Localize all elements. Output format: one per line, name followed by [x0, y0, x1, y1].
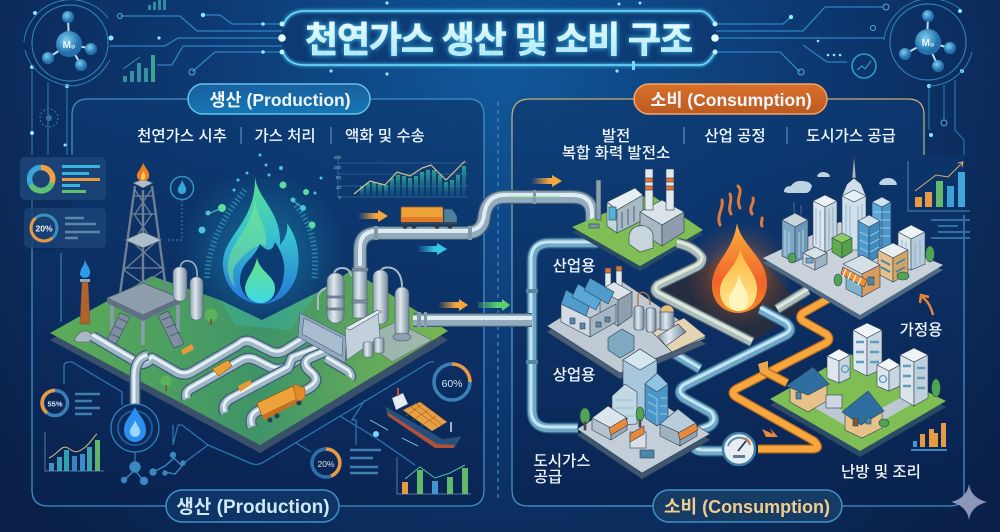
icon: four point star	[951, 484, 987, 520]
central orange flame	[712, 186, 767, 313]
city towers	[782, 155, 934, 297]
heading: production pill bottom	[166, 490, 339, 522]
title: 천연가스 생산 및 소비 구조	[305, 19, 693, 60]
truck on pipe	[401, 207, 457, 229]
flame glow	[177, 170, 347, 340]
donut 20%: 20%	[317, 459, 335, 469]
label: commercial: 상업용	[553, 366, 595, 384]
label: city gas supply: 도시가스	[533, 452, 591, 470]
donut 55%	[42, 390, 100, 416]
donut 60%	[434, 364, 470, 400]
line chart: production trend: 300	[333, 155, 341, 160]
ship	[370, 388, 462, 448]
arrows: consumption	[762, 295, 933, 437]
residential platform	[770, 354, 946, 457]
platform: power plant	[572, 194, 703, 271]
chart: residential bars	[911, 423, 947, 451]
heading: production pill	[188, 84, 370, 114]
heading: production pill: 생산 (Production)	[209, 90, 351, 110]
big gas flame	[198, 154, 322, 304]
donut 20%	[312, 449, 381, 477]
icon: bar trend top-left	[123, 55, 155, 82]
icon: molecule right	[884, 0, 972, 86]
label: household: 가정용	[900, 321, 942, 339]
text: production steps: 천연가스 시추	[137, 127, 227, 145]
houses and apartments	[786, 323, 940, 438]
heading: consumption pill	[634, 84, 827, 114]
text: consumption steps	[562, 127, 896, 162]
divider between panels	[497, 102, 499, 500]
small truck	[212, 360, 232, 376]
title	[278, 11, 719, 70]
donut 55%: 55%	[47, 400, 63, 408]
card: donut stats	[20, 157, 106, 200]
label: city gas supply	[533, 452, 591, 486]
bar chart lower left	[45, 432, 104, 471]
network traces lower	[64, 362, 434, 470]
icon: flame badge	[166, 176, 194, 240]
icon: molecule left	[24, 0, 114, 86]
oil derrick	[107, 163, 184, 348]
circuit traces	[30, 1, 964, 250]
icon: molecule left: M₀	[63, 40, 75, 51]
storage tanks left	[160, 261, 218, 391]
label: city gas supply: 공급	[534, 469, 562, 486]
industrial complex	[547, 266, 706, 379]
pipes: trunk and upper line	[360, 190, 598, 428]
plant: gas processing	[298, 262, 432, 363]
molecule lower	[122, 452, 185, 484]
blue gas drop node	[111, 404, 159, 452]
gas meter	[723, 433, 755, 465]
line chart: production trend: 200	[333, 165, 341, 170]
power plant	[589, 169, 684, 252]
heading: consumption pill bottom: 소비 (Consumption)	[664, 497, 830, 517]
pipes: production	[92, 334, 351, 427]
line chart: production trend: 50	[336, 175, 341, 180]
panel: production	[32, 99, 484, 506]
text: production steps: 가스 처리	[254, 127, 316, 145]
city platform	[763, 222, 943, 320]
heading: production pill bottom: 생산 (Production)	[176, 496, 330, 518]
arrows: production	[358, 175, 562, 311]
label: industrial: 산업용	[553, 257, 595, 275]
text: production steps	[137, 127, 425, 145]
text: production steps: 액화 및 수송	[345, 127, 425, 145]
flare stack	[74, 260, 96, 342]
text: consumption steps: 복합 화력 발전소	[562, 144, 670, 162]
card: 20% stats	[24, 208, 106, 248]
line chart: production trend: 20	[336, 185, 341, 190]
commercial district	[577, 349, 710, 479]
card: 20% stats: 20%	[35, 224, 53, 234]
donut 60%: 60%	[441, 378, 463, 390]
icon: small bar chart top	[148, 0, 166, 10]
chart: top right bars	[908, 161, 970, 238]
production platform	[50, 270, 448, 453]
text: consumption steps: 도시가스 공급	[806, 127, 896, 145]
panel: consumption	[512, 99, 964, 506]
text: consumption steps: 발전	[602, 127, 630, 145]
heading: consumption pill: 소비 (Consumption)	[650, 90, 812, 110]
heading: consumption pill bottom	[653, 490, 842, 522]
central flame glow and dark plate	[660, 223, 805, 342]
text: consumption steps: 산업 공정	[704, 127, 766, 145]
clouds	[784, 172, 897, 193]
pipes: consumption	[655, 242, 829, 451]
line chart: production trend	[333, 155, 468, 200]
line chart: production trend: 0	[338, 195, 341, 200]
large truck on platform	[257, 384, 305, 422]
icon: molecule right: M₀	[922, 38, 934, 49]
bar chart lower right	[397, 457, 471, 494]
label: heating and cooking: 난방 및 조리	[841, 463, 921, 481]
